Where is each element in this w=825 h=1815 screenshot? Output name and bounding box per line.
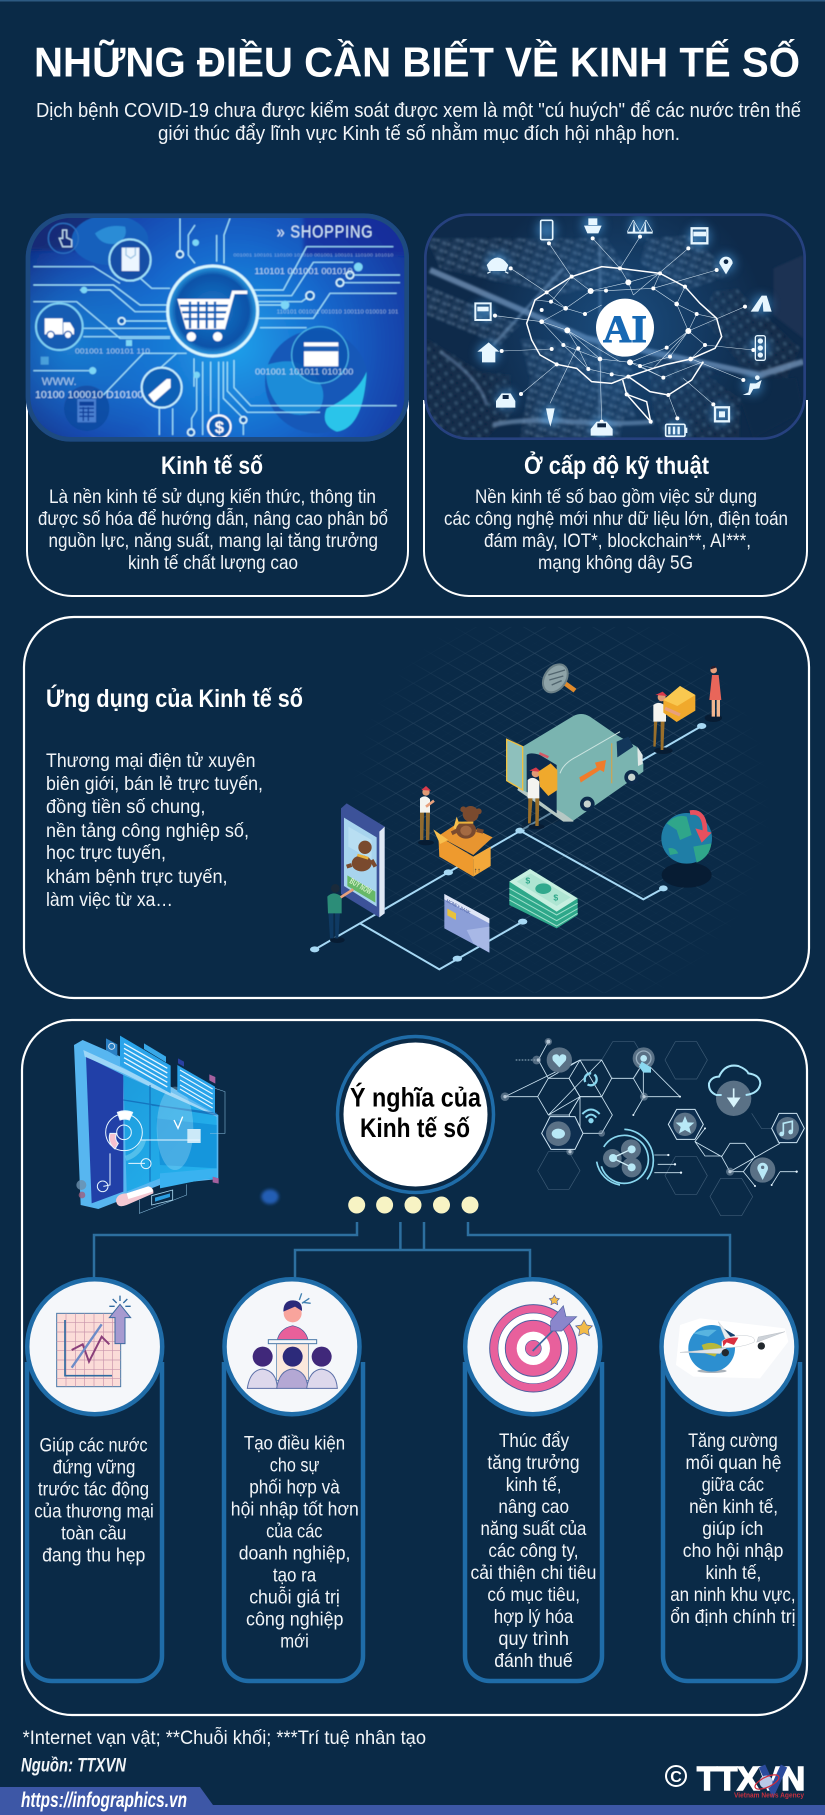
text: Kinh tế số definition: kinh tế chất lượng cao [128, 552, 298, 574]
text: card 3 [470, 1430, 596, 1672]
text: application list [46, 750, 263, 911]
illustration: connected hexagon network [501, 1038, 804, 1216]
title circle: Ý nghĩa của [350, 1082, 482, 1112]
text: card 1: đang thu hẹp [42, 1545, 146, 1567]
icon circle: growth chart [27, 1279, 162, 1414]
dots [348, 1196, 478, 1214]
footer strip [0, 1787, 825, 1815]
text: card 4 [670, 1430, 796, 1628]
text: technical level description: Nền kinh tế số bao gồm việc sử dụng [475, 486, 757, 508]
text: card 3: đánh thuế [494, 1650, 573, 1672]
card frame 2 [224, 1362, 363, 1681]
text: technical level description [444, 486, 788, 574]
icon: smartphone: BUY NOW [348, 876, 374, 896]
panel: Kinh tế số [26, 213, 410, 596]
text: card 3: các công ty, [488, 1540, 578, 1562]
intro text: giới thúc đẩy lĩnh vực Kinh tế số nhằm mục đích hội nhập hơn. [158, 122, 680, 145]
image: AI smart city [424, 213, 806, 441]
image: digital shopping circuit: 110101 001001 001010 [254, 266, 353, 276]
text: card 2: của các [266, 1520, 323, 1542]
text: application list: đồng tiền số chung, [46, 796, 206, 818]
text: card 4: Tăng cường [688, 1430, 778, 1452]
text: card 3: có mục tiêu, [487, 1584, 580, 1606]
panel: Ứng dụng của Kinh tế số [24, 617, 809, 998]
text: application list: làm việc từ xa… [46, 889, 173, 911]
image: digital shopping circuit: 001001 101011 010100 [255, 366, 354, 376]
text: card 2 [231, 1432, 359, 1652]
image: digital shopping circuit: 110101 001001 001010 100110 010010 101 [277, 310, 398, 316]
illustration: digital screen [74, 1036, 279, 1213]
icon: bank card [444, 894, 489, 953]
card frame 1 [27, 1362, 162, 1681]
text: card 3: nâng cao [498, 1496, 569, 1518]
image: AI smart city: AI [603, 307, 647, 351]
icon: woman [705, 666, 722, 722]
heading: Ở cấp độ kỹ thuật: Ở cấp độ kỹ thuật [524, 450, 710, 480]
logo: TTXVN: Vietnam News Agency [734, 1790, 805, 1800]
text: card 2: tạo ra [273, 1564, 316, 1586]
logo: TTXVN: TTXVN [697, 1760, 805, 1797]
title: NHỮNG ĐIỀU CẦN BIẾT VỀ KINH TẾ SỐ [34, 38, 800, 86]
text: card 2: chuỗi giá trị [249, 1585, 340, 1608]
text: application list: biên giới, bán lẻ trực tuyến, [46, 773, 263, 795]
source: Nguồn: TTXVN [21, 1754, 127, 1776]
icon: box with teddy bear [433, 806, 493, 877]
connector lines [94, 1222, 730, 1278]
text: technical level description: mạng không dây 5G [538, 552, 693, 574]
card frame 3 [465, 1362, 602, 1681]
text: card 2: Tạo điều kiện [244, 1432, 345, 1454]
text: card 1 [34, 1435, 154, 1567]
icon circle: cooperation [224, 1279, 360, 1414]
image: digital shopping circuit: 10100 100010 D10100 [35, 390, 143, 401]
text: card 4: giữa các [702, 1474, 764, 1496]
text: card 4: nền kinh tế, [689, 1496, 778, 1518]
text: card 2: cho sự [270, 1454, 319, 1476]
panel: Ở cấp độ kỹ thuật [424, 213, 807, 596]
icon: man loading van [528, 763, 557, 829]
illustration: e-commerce isometric scene [300, 627, 773, 993]
text: card 2: công nghiệp [246, 1608, 344, 1630]
text: card 4: cho hội nhập [683, 1540, 784, 1562]
text: card 2: hội nhập tốt hơn [231, 1498, 359, 1520]
text: card 3: cải thiện chi tiêu [470, 1562, 596, 1584]
icon: banknotes: $ [553, 893, 558, 903]
text: card 1: đứng vững [53, 1457, 135, 1479]
image: digital shopping circuit: » SHOPPING [277, 222, 373, 242]
text: card 2: phối hợp và [249, 1476, 340, 1498]
text: card 2: doanh nghiệp, [239, 1542, 350, 1564]
image: digital shopping circuit: $ [215, 418, 225, 437]
hexagon icons [542, 1047, 804, 1192]
title circle: Kinh tế số [360, 1113, 470, 1143]
icon circle: target [465, 1279, 600, 1414]
text: card 4: giúp ích [702, 1518, 763, 1540]
text: card 2: mới [280, 1630, 309, 1652]
icon: banknotes [509, 869, 578, 928]
text: card 4: kinh tế, [706, 1562, 761, 1584]
text: application list: khám bệnh trực tuyến, [46, 866, 228, 888]
image: digital shopping circuit [26, 213, 410, 442]
heading: Ứng dụng: Ứng dụng của Kinh tế số [46, 683, 303, 713]
icon: banknotes: $ [525, 875, 530, 885]
image: digital shopping circuit: 001001 100101 110 [75, 349, 150, 356]
text: card 4: an ninh khu vực, [670, 1584, 796, 1606]
documents [106, 1036, 219, 1184]
text: card 1: Giúp các nước [40, 1435, 148, 1457]
icon: delivery van [507, 714, 643, 840]
icon: box with teddy bear: ↑↑ [474, 867, 481, 874]
icon circle: airplane and globe [662, 1279, 796, 1414]
image: digital shopping circuit: 001001 100101 110100 101010 001001 100101 110100 101010 [233, 253, 394, 258]
footnote: *Internet vạn vật; **Chuỗi khối; ***Trí tuệ nhân tạo [23, 1726, 426, 1749]
heading: Kinh tế số: Kinh tế số [161, 452, 263, 480]
text: Kinh tế số definition: nguồn lực, năng suất, mang lại tăng trưởng [48, 530, 378, 552]
icon: man with clipboard [418, 786, 434, 845]
icon: magnifier [538, 660, 575, 697]
text: card 4: ổn định chính trị [670, 1606, 796, 1628]
text: card 3: hợp lý hóa [494, 1606, 573, 1628]
text: application list: nền tảng công nghiệp số, [46, 820, 249, 842]
logo: TTXVN: C [670, 1769, 682, 1786]
text: card 1: trước tác động [38, 1479, 149, 1501]
text: application list: Thương mại điện tử xuyên [46, 750, 256, 772]
card frame 4 [663, 1362, 800, 1681]
text: card 1: toàn cầu [61, 1523, 126, 1545]
panel: Ý nghĩa của Kinh tế số [22, 1020, 807, 1715]
intro text [36, 99, 802, 145]
icon: man carrying box [653, 686, 695, 754]
text: card 3: quy trình [498, 1628, 569, 1650]
text: application list: học trực tuyến, [46, 842, 166, 864]
icon: smartphone [341, 803, 385, 917]
text: card 4: mối quan hệ [686, 1452, 781, 1474]
icon: bank card: MONEY BANK [446, 898, 472, 915]
text: Kinh tế số definition: Là nền kinh tế sử dụng kiến thức, thông tin [49, 486, 376, 508]
gauge [97, 1111, 200, 1192]
text: card 3: năng suất của [480, 1518, 587, 1540]
text: card 3: tăng trưởng [487, 1452, 580, 1474]
icon: person tapping phone [327, 884, 353, 943]
text: technical level description: đám mây, IOT*, blockchain**, AI***, [484, 530, 751, 552]
text: card 3: kinh tế, [506, 1474, 562, 1496]
text: card 1: của thương mại [34, 1501, 154, 1523]
central cart [168, 266, 258, 356]
text: Kinh tế số definition [38, 486, 388, 574]
icon: globe with arrow [661, 812, 712, 888]
text: card 3: Thúc đẩy [499, 1430, 569, 1452]
website url: https://infographics.vn [21, 1789, 187, 1812]
text: Kinh tế số definition: được số hóa để hướng dẫn, nâng cao phân bổ [38, 507, 388, 530]
title circle [338, 1036, 494, 1192]
image: digital shopping circuit: WWW. [42, 376, 77, 388]
